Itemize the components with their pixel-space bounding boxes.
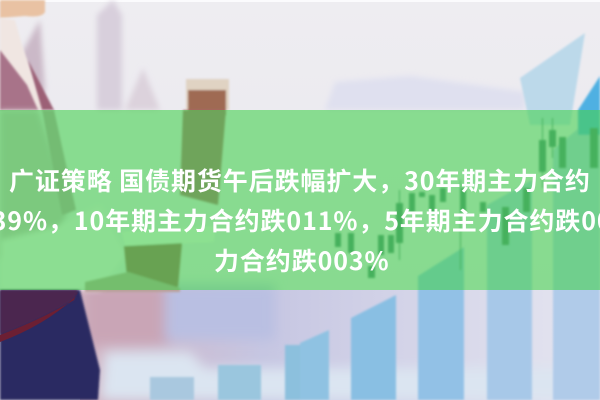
businessman xyxy=(0,0,126,400)
green translucent band xyxy=(0,110,600,290)
headline line 3: 力合约跌003% xyxy=(214,242,390,278)
laptop xyxy=(85,79,229,292)
blue chart columns xyxy=(150,33,600,400)
city skyline xyxy=(18,0,525,110)
candlestick chart xyxy=(335,118,598,278)
headline text xyxy=(0,162,600,278)
lower city reflection xyxy=(80,290,600,400)
headline line 1: 广证策略 国债期货午后跌幅扩大，30年期主力合约 xyxy=(9,162,591,198)
